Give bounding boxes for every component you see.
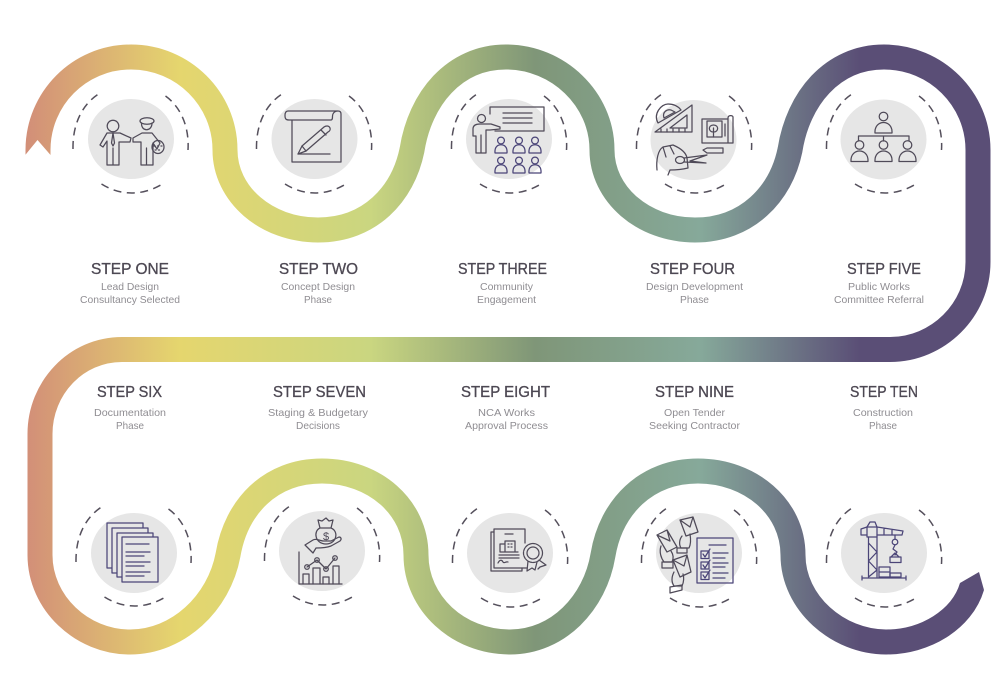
description: step seven: Decisions [296,420,340,432]
heading: step eight: STEP EIGHT [461,384,551,401]
step six [76,384,191,606]
description: step two: Phase [304,294,332,306]
description: step six: Phase [116,420,144,432]
checklist [697,538,733,583]
step five badge [826,94,942,193]
hands holding envelopes [657,517,698,593]
step one badge [73,94,188,193]
description: step ten: Phase [869,420,897,432]
description: step nine: Seeking Contractor [649,420,740,432]
description: step eight: Approval Process [465,420,548,432]
icon: scroll and pencil [285,111,341,162]
step two badge [256,94,372,193]
icon: bids and checklist [657,517,733,593]
icon: money bag, hand and chart: $ [323,531,329,543]
step two [256,94,372,306]
description: step five: Committee Referral [834,294,924,306]
step nine badge [641,508,757,607]
step four badge [636,94,752,193]
description: step three: Engagement [477,294,536,306]
description: step one [80,281,180,306]
icon: two people shaking hands [100,118,164,165]
description: step nine: Open Tender [664,407,725,419]
step four [636,94,752,306]
icon: drafting tools and hand [655,104,733,175]
description: step ten: Construction [853,407,913,419]
step six badge [76,507,191,606]
description: step five: Public Works [848,281,910,293]
description: step five [834,281,924,306]
step eight badge [452,508,568,607]
heading: step nine: STEP NINE [655,384,734,401]
description: step ten [853,407,913,432]
description: step seven: Staging & Budgetary [268,407,369,419]
heading: step seven: STEP SEVEN [273,384,366,401]
heading: step one: STEP ONE [91,261,169,278]
icon: tower crane [861,522,906,580]
description: step four: Design Development [646,281,743,293]
step five [826,94,942,306]
description: step seven [268,407,369,432]
description: step nine [649,407,740,432]
description: step two: Concept Design [281,281,355,293]
icon: organisation chart [851,112,916,162]
heading: step five: STEP FIVE [847,261,921,278]
step one [73,94,188,306]
heading: step ten: STEP TEN [850,384,918,401]
description: step eight [465,407,548,432]
description: step two [281,281,355,306]
step three [451,94,567,306]
description: step one: Lead Design [101,281,159,293]
description: step eight: NCA Works [478,407,535,419]
description: step one: Consultancy Selected [80,294,180,306]
description: step six [94,407,166,432]
step ten badge [826,508,942,607]
step nine [641,384,757,607]
icon: approval certificate with seal [491,529,546,571]
description: step four [646,281,743,306]
step seven [264,384,380,605]
icon: stacked documents [107,523,158,582]
step ten [826,384,942,607]
icon: presenter and audience [473,107,544,173]
step seven badge [264,506,380,605]
description: step four: Phase [680,294,709,306]
heading: step four: STEP FOUR [650,261,735,278]
step eight [452,384,568,607]
heading: step six: STEP SIX [97,384,163,401]
heading: step three: STEP THREE [458,261,547,278]
description: step six: Documentation [94,407,166,419]
description: step three [477,281,536,306]
heading: step two: STEP TWO [279,261,358,278]
description: step three: Community [480,281,534,293]
step three badge [451,94,567,193]
icon: money bag, hand and chart [299,518,342,584]
